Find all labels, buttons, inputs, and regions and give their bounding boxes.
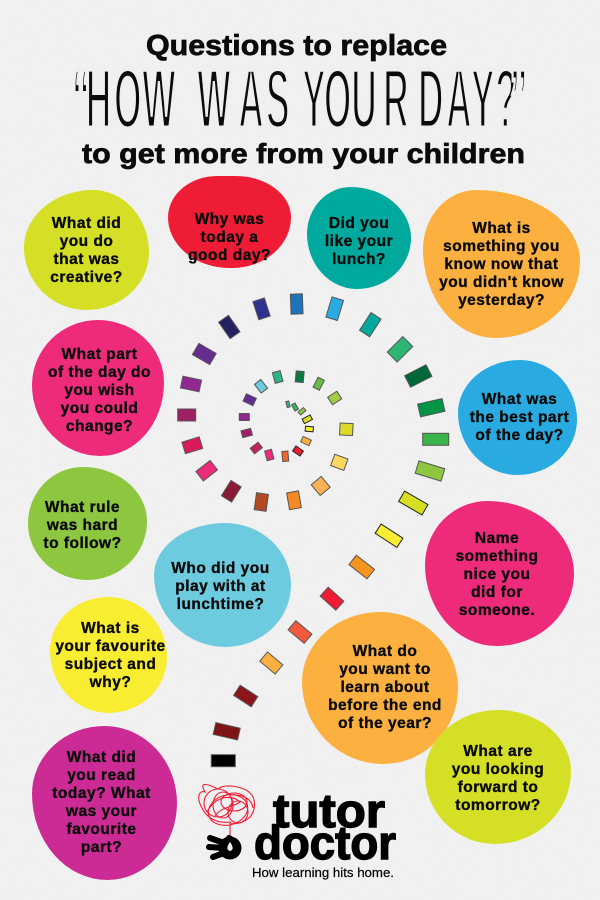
bubble: looking forward to tomorrow: tomorrow? (455, 797, 541, 814)
bubble: name something nice (425, 501, 574, 646)
bubble: what did you read today: you read (67, 767, 136, 784)
bubble: did you like your lunch: lunch? (332, 251, 386, 268)
bubble: favourite subject (50, 597, 167, 713)
bubble: what do you want to learn: learn about (340, 679, 430, 696)
bubble: did you like your lunch: like your (325, 233, 393, 250)
bubble: looking forward to tomorrow: forward to (458, 779, 538, 796)
bubble: what did you do that was creative: that was (53, 251, 120, 268)
bubble: what do you want to learn: before the end (328, 697, 442, 714)
bubble: what rule was hard to follow (28, 467, 147, 580)
bubble: what did you do that was creative: you do (60, 233, 113, 250)
bubble: who did you play with: lunchtime? (177, 596, 264, 613)
bubble: what part of the day: of the day do (48, 364, 151, 381)
bubble: why was today a good day: Why was (195, 211, 264, 228)
bubble: what did you read today: favourite (67, 821, 136, 838)
bubble: name something nice: did for (471, 584, 523, 601)
wordmark: doctor: doctor (254, 816, 396, 869)
bubble: what did you read today (32, 726, 177, 880)
bubble: what rule was hard to follow: What rule (45, 498, 120, 516)
bubble: favourite subject: subject and (65, 656, 156, 672)
bubble: what did you read today: part? (81, 839, 122, 856)
bubble: what part of the day: you wish (64, 382, 135, 399)
wordmark: tutor: tutor (273, 784, 385, 837)
bubble: what part of the day: change? (66, 418, 133, 435)
bubble: what do you want to learn: What do (353, 643, 417, 660)
bubble: what rule was hard to follow: was hard (47, 516, 118, 534)
bubble: best part of the day: of the day? (475, 426, 564, 444)
bubble: did you like your lunch: Did you (329, 215, 389, 232)
bubble: what is something you know now: yesterday? (458, 292, 545, 308)
bubble: name something nice: someone. (459, 602, 535, 619)
bubble: what do you want to learn (302, 612, 458, 764)
bubble: what is something you know now (423, 190, 580, 338)
icon: black hand (209, 836, 242, 860)
bubble: what did you read today: was your (66, 803, 137, 820)
bubble: what did you do that was creative: What did (52, 215, 121, 232)
bubble: what rule was hard to follow: to follow? (43, 534, 122, 552)
title line: questions to replace: Questions to replace (146, 30, 447, 62)
bubble: who did you play with (154, 523, 291, 647)
bubble: what do you want to learn: of the year? (338, 715, 432, 732)
bubble: looking forward to tomorrow: What are (463, 743, 533, 760)
bubble: best part of the day (458, 360, 577, 475)
bubble: why was today a good day: today a (201, 229, 258, 246)
bubble: what part of the day (32, 320, 164, 456)
bubble: what did you do that was creative (24, 190, 149, 310)
bubble: why was today a good day (168, 176, 291, 268)
bubble: who did you play with: Who did you (171, 560, 270, 577)
bubble: looking forward to tomorrow: you looking (452, 761, 544, 778)
bubble: what is something you know now: you didn't know (439, 274, 564, 290)
bubble: what did you do that was creative: creative? (50, 269, 123, 286)
bubble: favourite subject: why? (90, 674, 131, 690)
bubble: what is something you know now: something you (443, 238, 560, 254)
bubble: what is something you know now: What is (472, 220, 531, 236)
tagline: How learning hits home. (252, 866, 394, 880)
bubble: looking forward to tomorrow (425, 710, 571, 844)
bubble: name something nice: nice you (464, 566, 530, 583)
bubble: what is something you know now: know now that (444, 256, 559, 272)
bubble: what did you read today: today? What (52, 785, 151, 802)
bubble: favourite subject: What is (81, 620, 140, 636)
bubble: best part of the day: the best part (470, 408, 569, 426)
bubble: what part of the day: you could (61, 400, 138, 417)
bubble: did you like your lunch (307, 187, 411, 289)
bubble: name something nice: something (456, 548, 538, 565)
bubble: name something nice: Name (475, 530, 519, 547)
title line: to get more from your children: to get more from your children (82, 138, 525, 169)
title (72, 30, 528, 170)
bubble: why was today a good day: good day? (188, 247, 271, 264)
icon: red scribble brain (199, 784, 254, 840)
bubble: what do you want to learn: you want to (339, 661, 431, 678)
bubble: what part of the day: What part (62, 346, 137, 363)
bubble: what did you read today: What did (67, 749, 136, 766)
title line: how was your day: “HOW WAS YOUR DAY?” (72, 51, 528, 146)
bubble: favourite subject: your favourite (55, 638, 166, 654)
bubble: best part of the day: What was (482, 390, 557, 408)
bubble: who did you play with: play with at (175, 578, 266, 595)
